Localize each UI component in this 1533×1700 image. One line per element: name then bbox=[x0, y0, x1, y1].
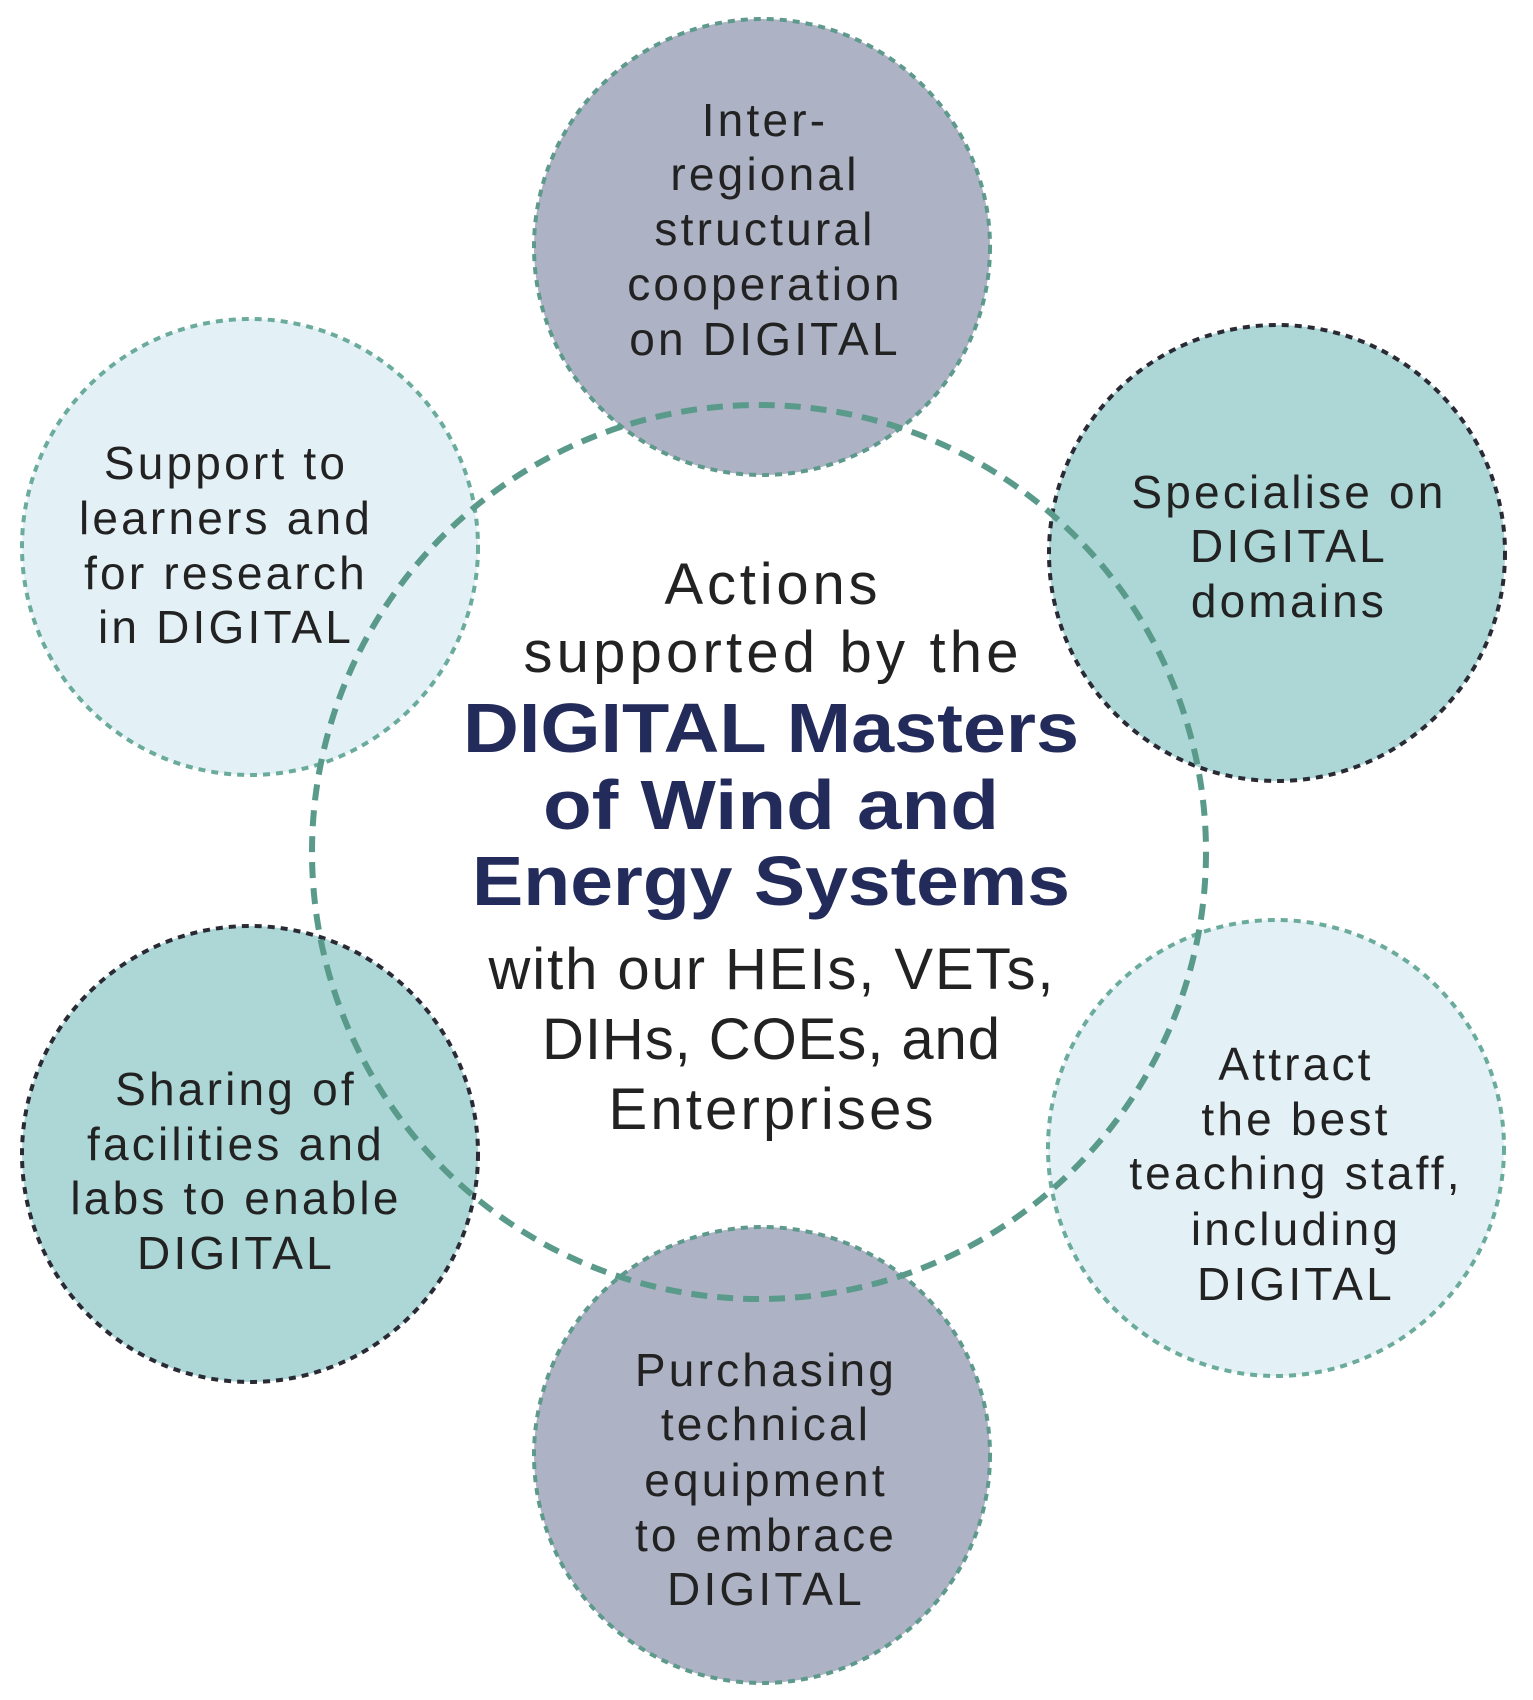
text: sharing bbox=[70, 1063, 402, 1279]
text: support: for research bbox=[84, 547, 368, 599]
text: purchasing: Purchasing bbox=[635, 1344, 897, 1396]
text: center title: Actions bbox=[664, 552, 878, 617]
text: support: Support to bbox=[104, 437, 348, 489]
text: center title bbox=[463, 552, 1079, 1142]
text: specialise: Specialise on bbox=[1131, 466, 1447, 518]
circle: attract staff bbox=[1048, 920, 1504, 1376]
text: attract: teaching staff, bbox=[1129, 1147, 1463, 1199]
central dashed circle bbox=[312, 405, 1206, 1299]
circle: specialise bbox=[1049, 325, 1505, 781]
text: support: in DIGITAL bbox=[98, 601, 354, 653]
text: sharing: facilities and bbox=[87, 1118, 385, 1170]
circle: inter-regional cooperation bbox=[534, 19, 990, 475]
text: specialise bbox=[1131, 466, 1447, 627]
text: attract: DIGITAL bbox=[1197, 1258, 1395, 1310]
text: attract: the best bbox=[1201, 1093, 1391, 1145]
text: inter-regional: regional bbox=[670, 148, 860, 200]
text: specialise: domains bbox=[1191, 575, 1387, 627]
text: center title: supported by the bbox=[524, 620, 1018, 685]
text: inter-regional: on DIGITAL bbox=[629, 313, 901, 365]
text: sharing: DIGITAL bbox=[137, 1227, 335, 1279]
text: center title: with our HEIs, VETs, bbox=[488, 937, 1054, 1002]
text: center title: Energy Systems bbox=[472, 842, 1070, 920]
text: purchasing bbox=[635, 1344, 897, 1615]
circle: support to learners bbox=[22, 319, 478, 775]
text: inter-regional: Inter- bbox=[702, 94, 828, 146]
text: sharing: labs to enable bbox=[70, 1172, 402, 1224]
text: support: learners and bbox=[79, 492, 373, 544]
text: center title: DIHs, COEs, and bbox=[542, 1007, 1000, 1072]
text: center title: DIGITAL Masters bbox=[463, 689, 1079, 767]
text: purchasing: equipment bbox=[644, 1454, 888, 1506]
text: purchasing: to embrace bbox=[635, 1509, 897, 1561]
text: inter-regional: cooperation bbox=[627, 258, 903, 310]
text: purchasing: DIGITAL bbox=[667, 1563, 865, 1615]
circle: purchasing equipment bbox=[534, 1227, 990, 1683]
text: inter-regional bbox=[627, 94, 903, 365]
circle: sharing facilities bbox=[22, 926, 478, 1382]
text: specialise: DIGITAL bbox=[1190, 520, 1388, 572]
text: center title: of Wind and bbox=[543, 766, 999, 844]
text: center title: Enterprises bbox=[608, 1077, 934, 1142]
text: inter-regional: structural bbox=[654, 203, 876, 255]
text: attract: Attract bbox=[1218, 1038, 1374, 1090]
text: purchasing: technical bbox=[661, 1398, 871, 1450]
text: attract bbox=[1129, 1038, 1463, 1310]
text: sharing: Sharing of bbox=[115, 1063, 357, 1115]
text: attract: including bbox=[1191, 1203, 1401, 1255]
text: support bbox=[79, 437, 373, 653]
